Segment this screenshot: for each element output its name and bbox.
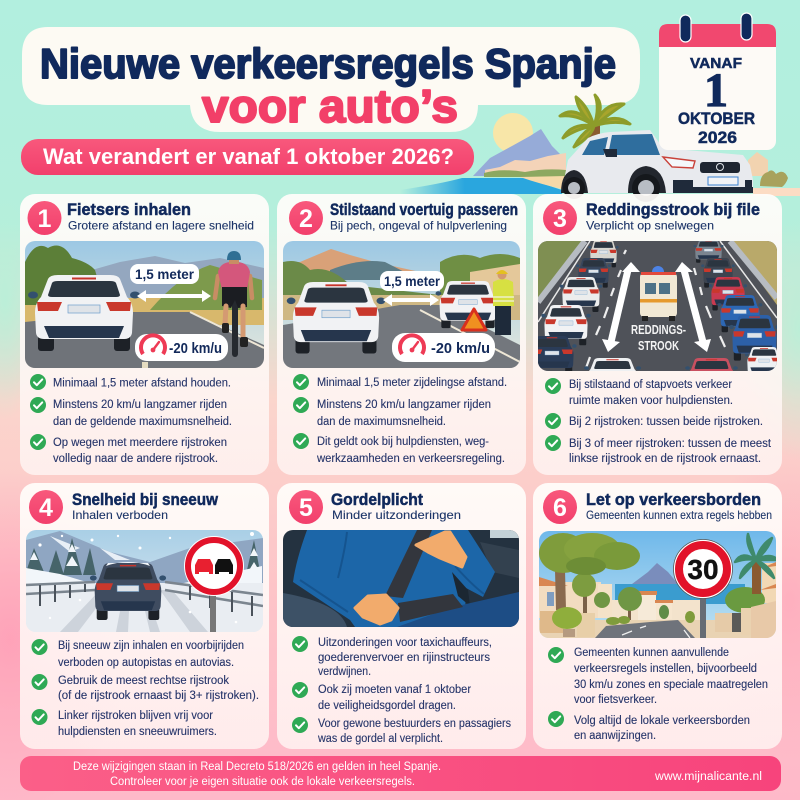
bullets 6: Volg altijd de lokale verkeersborden	[574, 715, 750, 727]
title: Nieuwe verkeersregels Spanje	[40, 40, 616, 87]
illustration: snowy road with no-overtaking sign	[26, 530, 263, 632]
panel 6: verkeersborden	[533, 483, 782, 749]
bullets 3: linkse rijstrook en de rijstrook ernaast.	[569, 453, 761, 465]
distance label: 1,5 meter	[135, 266, 195, 282]
bullets 4: Linker rijstroken blijven vrij voor	[58, 710, 213, 722]
number badge 5	[289, 490, 323, 524]
number badge 1	[28, 201, 62, 235]
bullets 3: Bij 3 of meer rijstroken: tussen de meest	[569, 438, 772, 450]
white suv side-front	[561, 130, 753, 202]
bullets 1: dan de geldende maximumsnelheid.	[53, 416, 232, 428]
subheading 2: Bij pech, ongeval of hulpverlening	[330, 218, 507, 232]
footer note: Deze wijzigingen staan in Real Decreto 518/2026 en gelden in heel Spanje.	[73, 761, 441, 773]
bullets 1: Op wegen met meerdere rijstroken	[53, 437, 227, 449]
speed label: -20 km/u	[169, 341, 222, 357]
calendar: OKTOBER	[678, 110, 755, 128]
cyclist	[215, 251, 252, 357]
bullets 2: Minimaal 1,5 meter zijdelingse afstand.	[317, 377, 507, 389]
upper hand	[416, 532, 466, 567]
bullets 2: werkzaamheden en verkeersregeling.	[316, 453, 505, 465]
sleeve folds	[300, 532, 484, 612]
bullets 5: goederenvervoer en rijinstructeurs	[318, 652, 490, 664]
shoulder belt	[385, 530, 432, 598]
distance arrow	[137, 290, 211, 302]
bullets 5	[292, 636, 511, 745]
lower hand	[355, 595, 398, 624]
bullets 1: volledig naar de andere rijstrook.	[53, 453, 218, 465]
lap belt	[398, 594, 463, 622]
houses	[539, 582, 601, 618]
speed label 2	[392, 333, 495, 362]
number badge 3: 3	[553, 205, 567, 233]
number badge 6: 6	[553, 494, 567, 522]
bullets 4: (of de rijstrook ernaast bij 3+ rijstroken).	[58, 690, 259, 702]
bullets 5: was de gordel al verplicht.	[317, 733, 443, 745]
panel 2: stilstaand voertuig	[277, 194, 526, 475]
subtitle pill	[21, 139, 474, 175]
bullets 4: Gebruik de meest rechtse rijstrook	[58, 675, 229, 687]
heading 3: Reddingsstrook bij file	[586, 201, 760, 219]
number badge 4	[29, 490, 63, 524]
double arrow left	[602, 262, 640, 352]
number badge 6	[543, 490, 577, 524]
blue sweater	[293, 530, 495, 627]
illustration: passing a stopped vehicle	[283, 241, 520, 368]
gap under right sleeve	[452, 572, 470, 606]
illustration: fastening a seat belt	[283, 530, 519, 627]
distance label 2: 1,5 meter	[384, 273, 441, 289]
double arrow right	[675, 262, 711, 352]
number badge 4: 4	[39, 494, 53, 522]
subtitle pill: Wat verandert er vanaf 1 oktober 2026?	[43, 144, 454, 169]
bullets 2: Dit geldt ook bij hulpdiensten, weg-	[317, 436, 489, 448]
number badge 2	[289, 201, 323, 235]
number badge 5: 5	[299, 494, 313, 522]
number badge 1: 1	[38, 205, 52, 233]
right walls and gate	[715, 601, 776, 638]
lane label	[632, 325, 686, 350]
bullets 3	[545, 378, 772, 465]
subheading 4: Inhalen verboden	[72, 508, 168, 522]
bullets 6: 30 km/u zones en speciale maatregelen	[574, 679, 768, 691]
warning triangle	[462, 309, 486, 330]
heading 1: Fietsers inhalen	[67, 201, 191, 219]
bullets 5: de veiligheidsgordel dragen.	[318, 700, 456, 712]
subheading 5: Minder uitzonderingen	[332, 508, 461, 522]
subheading 1: Grotere afstand en lagere snelheid	[68, 218, 254, 232]
title bubble	[22, 27, 640, 132]
bullets 5: verdwijnen.	[318, 666, 371, 678]
illustration: Spanish street with 30 sign	[539, 531, 778, 638]
bullets 3: Bij stilstaand of stapvoets verkeer	[569, 379, 732, 391]
panel 1: fietsers inhalen	[20, 194, 269, 475]
footer bar	[20, 756, 781, 791]
bullets 6: en aanwijzingen.	[574, 730, 656, 742]
bullets 5: Uitzonderingen voor taxichauffeurs,	[318, 637, 492, 649]
bullets 4: Bij sneeuw zijn inhalen en voorbijrijden	[58, 640, 244, 652]
panel 4: sneeuw	[20, 483, 269, 749]
panel 3: reddingsstrook	[527, 194, 783, 475]
calendar	[659, 13, 776, 150]
speed limit sign	[674, 540, 732, 638]
subheading 3: Verplicht op snelwegen	[586, 218, 714, 232]
number badge 2: 2	[299, 205, 313, 233]
bullets 6	[548, 647, 768, 742]
bullets 4	[32, 639, 259, 738]
bushes	[552, 607, 695, 637]
worker in hi-vis	[493, 270, 514, 335]
bullets 6: voor fietsverkeer.	[574, 694, 657, 706]
bullets 3: ruimte maken voor hulpdiensten.	[569, 395, 733, 407]
pavement	[539, 620, 776, 638]
stone walls left	[540, 611, 564, 633]
bullets 6: Gemeenten kunnen aanvullende	[574, 647, 729, 659]
bullets 4: hulpdiensten en sneeuwruimers.	[58, 726, 217, 738]
bullets 6: verkeersregels instellen, bijvoorbeeld	[574, 663, 757, 675]
seat cushion	[283, 593, 347, 627]
ambulance	[640, 266, 677, 321]
bullets 2: dan de maximumsnelheid.	[317, 416, 446, 428]
bullets 5: Ook zij moeten vanaf 1 oktober	[318, 684, 471, 696]
big tree	[539, 533, 640, 610]
speed limit sign: 30	[687, 554, 719, 585]
bullets 2	[293, 374, 507, 465]
speed label 2: -20 km/u	[431, 341, 490, 357]
title accent: voor auto’s	[202, 80, 458, 132]
bullets 1: Minstens 20 km/u langzamer rijden	[53, 399, 227, 411]
legs	[397, 592, 519, 627]
number badge 3	[543, 201, 577, 235]
speed label	[135, 334, 228, 361]
coastal scene with car	[400, 95, 800, 202]
calendar: 1	[704, 64, 728, 117]
lane label: REDDINGS-	[631, 323, 686, 337]
palm tree	[560, 95, 630, 147]
subheading 6: Gemeenten kunnen extra regels hebben	[586, 508, 772, 522]
palm	[735, 534, 778, 594]
footer note	[73, 761, 441, 788]
illustration: car overtaking cyclist	[25, 241, 264, 370]
no overtaking sign	[184, 536, 244, 632]
heading 2: Stilstaand voertuig passeren	[330, 201, 518, 219]
panel 5: gordelplicht	[277, 483, 526, 749]
footer note: Controleer voor je eigen situatie ook de lokale verkeersregels.	[110, 776, 415, 788]
falling snow	[38, 532, 254, 623]
left queue of cars	[538, 241, 641, 371]
heading 5: Gordelplicht	[331, 491, 423, 509]
heading 4: Snelheid bij sneeuw	[72, 491, 218, 509]
lane label: STROOK	[638, 339, 679, 353]
small trees	[572, 573, 669, 622]
right house and bush	[762, 563, 776, 603]
calendar: 2026	[698, 129, 737, 147]
bullets 1	[30, 374, 232, 465]
distance arrow 2	[383, 294, 439, 306]
calendar: VANAF	[690, 55, 742, 72]
heading 6: Let op verkeersborden	[586, 491, 761, 509]
right queue of cars	[685, 241, 777, 371]
bullets 2: Minstens 20 km/u langzamer rijden	[317, 399, 491, 411]
road	[595, 620, 695, 638]
bullets 3: Bij 2 rijstroken: tussen beide rijstroken.	[569, 416, 763, 428]
illustration: emergency lane in traffic	[538, 241, 777, 371]
bullets 1: Minimaal 1,5 meter afstand houden.	[53, 378, 231, 390]
bullets 5: Voor gewone bestuurders en passagiers	[318, 718, 511, 730]
bullets 4: verboden op autopistas en autovias.	[58, 657, 234, 669]
website: www.mijnalicante.nl	[654, 771, 762, 783]
